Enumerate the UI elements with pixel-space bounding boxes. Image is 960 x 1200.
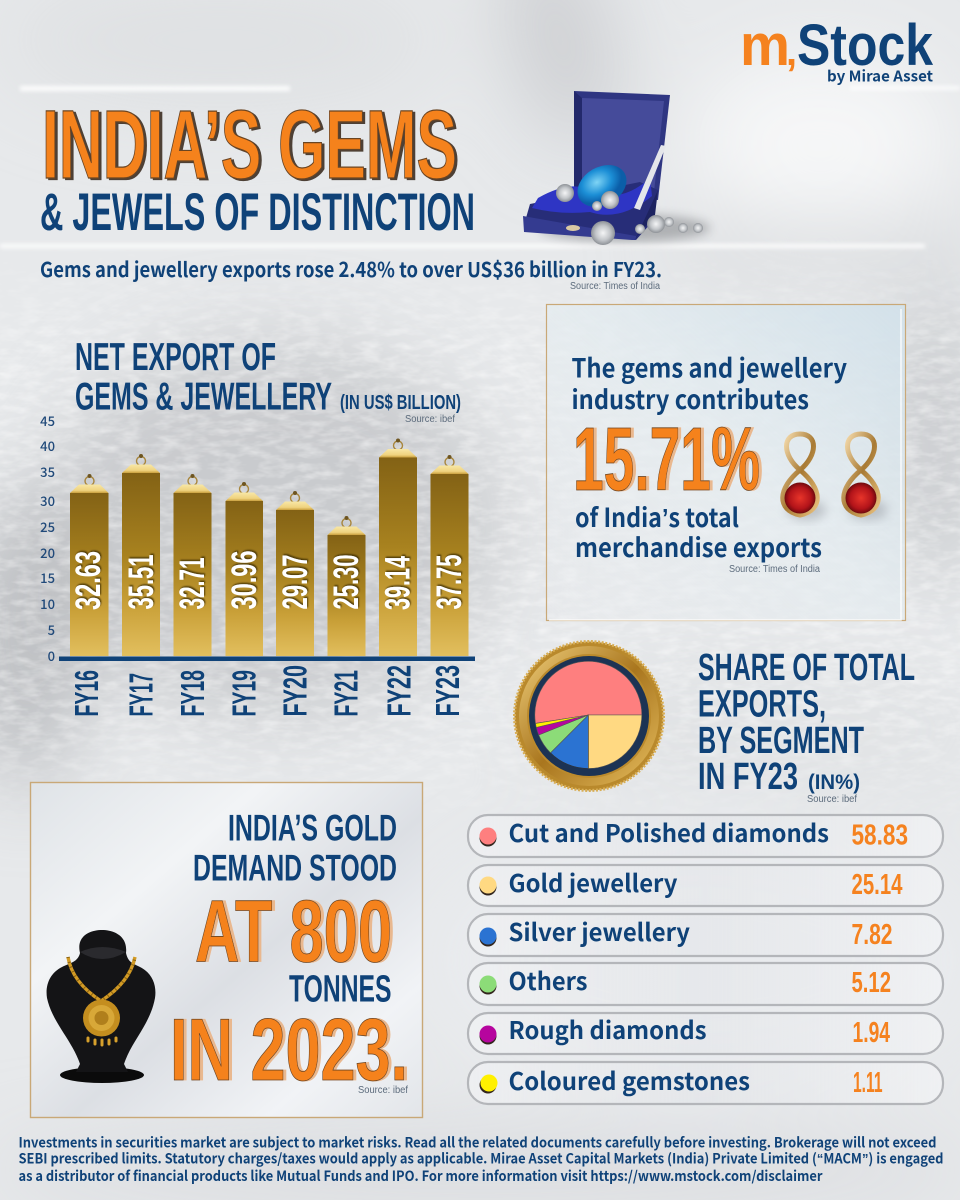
bar: FY20: 29.07 <box>276 554 315 610</box>
row: Coloured gemstones <box>468 1062 943 1104</box>
x axis labels: FY20 <box>276 665 314 716</box>
title: & JEWELS OF DISTINCTION <box>40 183 475 242</box>
panel text: merchandise exports <box>575 528 822 565</box>
y axis labels: 30 <box>40 491 55 510</box>
row: Others <box>468 963 943 1005</box>
panel text: 15.71% <box>573 410 760 510</box>
heading: share of total exports: BY SEGMENT <box>698 720 864 762</box>
panel text <box>170 808 408 1099</box>
y axis labels: 10 <box>40 594 55 613</box>
panel text: IN 2023. <box>170 1000 408 1099</box>
panel text: Source: Times of India <box>729 564 820 575</box>
y axis labels: 35 <box>40 462 55 481</box>
panel text: Source: ibef <box>358 1085 408 1096</box>
y axis labels: 5 <box>48 620 55 639</box>
heading: share of total exports: (IN%) <box>808 771 860 794</box>
bar: FY21: 25.30 <box>327 554 366 610</box>
x axis labels: FY18 <box>174 670 211 716</box>
logo: mStock <box>740 13 934 86</box>
y axis labels: 20 <box>40 543 55 562</box>
row: Rough diamonds <box>468 1012 943 1054</box>
row: Others: Others <box>508 963 588 998</box>
chart heading <box>75 336 461 425</box>
panel text: industry contributes <box>572 380 809 417</box>
logo: mStock: by Mirae Asset <box>827 66 934 86</box>
bar: FY19: 30.96 <box>225 550 264 610</box>
pie chart: segment share medal <box>514 642 664 790</box>
title: INDIA’S GEMS <box>42 90 457 199</box>
panel text: DEMAND STOOD <box>193 848 397 888</box>
x axis labels: FY19 <box>226 670 262 716</box>
disclaimer: as a distributor of financial products like Mutual Funds and IPO. For more information visit https://www.mstock.com/disclaimer <box>18 1166 823 1186</box>
y axis labels: 25 <box>40 517 55 536</box>
title <box>40 90 475 242</box>
panel text: The gems and jewellery <box>572 348 847 386</box>
chart heading: (IN US$ BILLION) <box>340 392 461 414</box>
heading: share of total exports: IN FY23 <box>698 756 798 798</box>
heading: share of total exports: EXPORTS, <box>698 684 826 726</box>
heading: share of total exports <box>698 647 915 805</box>
row: Coloured gemstones: Coloured gemstones <box>508 1063 750 1098</box>
bar: FY17: 35.51 <box>122 554 161 610</box>
row: Rough diamonds: Rough diamonds <box>508 1012 706 1047</box>
logo: mStock: Stock <box>797 13 934 78</box>
x axis labels: FY22 <box>380 665 418 716</box>
panel text: INDIA’S GOLD <box>228 808 397 848</box>
panel text: TONNES <box>289 968 392 1010</box>
bar: FY18 <box>173 474 212 656</box>
bar: FY17 <box>122 454 161 656</box>
background <box>0 0 960 796</box>
bar: FY22: 39.14 <box>378 556 418 610</box>
row: Cut and Polished diamonds: Cut and Polished diamonds <box>508 815 829 850</box>
bar: FY23 <box>430 455 469 656</box>
subtitle: Gems and jewellery exports rose 2.48% to over US$36 billion in FY23. <box>40 253 662 283</box>
icon: jewellery box <box>523 91 710 245</box>
row: Rough diamonds: 1.94 <box>852 1017 890 1049</box>
row: Others: 5.12 <box>852 967 891 999</box>
chart heading: GEMS & JEWELLERY <box>75 376 332 418</box>
chart heading: NET EXPORT OF <box>75 336 276 379</box>
chart heading: Source: ibef <box>405 414 455 425</box>
panel: 15.71% of merchandise exports <box>546 304 906 621</box>
disclaimer <box>18 1132 944 1186</box>
y axis labels: 40 <box>40 436 55 455</box>
row: Coloured gemstones: 1.11 <box>853 1067 882 1099</box>
row: Silver jewellery: 7.82 <box>852 919 892 951</box>
bar: FY18: 32.71 <box>173 557 212 610</box>
row: Gold jewellery: 25.14 <box>852 869 902 901</box>
panel text <box>572 348 847 575</box>
row: Cut and Polished diamonds: 58.83 <box>852 820 908 852</box>
bar chart: net export <box>40 411 475 716</box>
y axis labels <box>40 411 55 665</box>
x axis labels: FY16 <box>68 670 105 716</box>
bar: FY21 <box>327 516 366 656</box>
bar: FY23: 37.75 <box>430 554 469 610</box>
icon: ruby earrings <box>783 434 888 520</box>
row: Gold jewellery: Gold jewellery <box>508 865 678 900</box>
icon: necklace on bust <box>47 930 155 1083</box>
row: Gold jewellery <box>468 865 943 906</box>
y axis labels: 15 <box>40 568 55 587</box>
bar: FY16: 32.63 <box>69 551 108 610</box>
x axis labels: FY21 <box>328 670 364 716</box>
disclaimer: SEBI prescribed limits. Statutory charges/taxes would apply as applicable. Mirae Asset Capital Markets (India) Private Limited (“MACM”) is engaged <box>18 1148 944 1168</box>
row: Cut and Polished diamonds <box>468 815 943 857</box>
row: Silver jewellery <box>468 914 943 956</box>
logo: mStock: , <box>786 30 797 74</box>
bar: FY20 <box>276 491 315 656</box>
heading: share of total exports: Source: ibef <box>807 794 857 805</box>
row: Silver jewellery: Silver jewellery <box>508 914 690 949</box>
x axis labels <box>68 665 466 716</box>
x axis labels: FY23 <box>429 665 466 716</box>
bar: FY16 <box>69 474 108 656</box>
x axis labels: FY17 <box>122 673 160 716</box>
subtitle: Source: Times of India <box>570 281 660 292</box>
bar: FY19 <box>225 482 264 656</box>
bar: FY22 <box>378 438 418 656</box>
panel text: of India’s total <box>575 498 739 535</box>
logo: mStock: m <box>740 13 790 78</box>
panel: gold demand <box>30 782 423 1118</box>
panel text: AT 800 <box>195 882 392 980</box>
y axis labels: 0 <box>48 646 55 665</box>
y axis labels: 45 <box>40 411 55 430</box>
legend: segment values <box>468 815 943 1104</box>
